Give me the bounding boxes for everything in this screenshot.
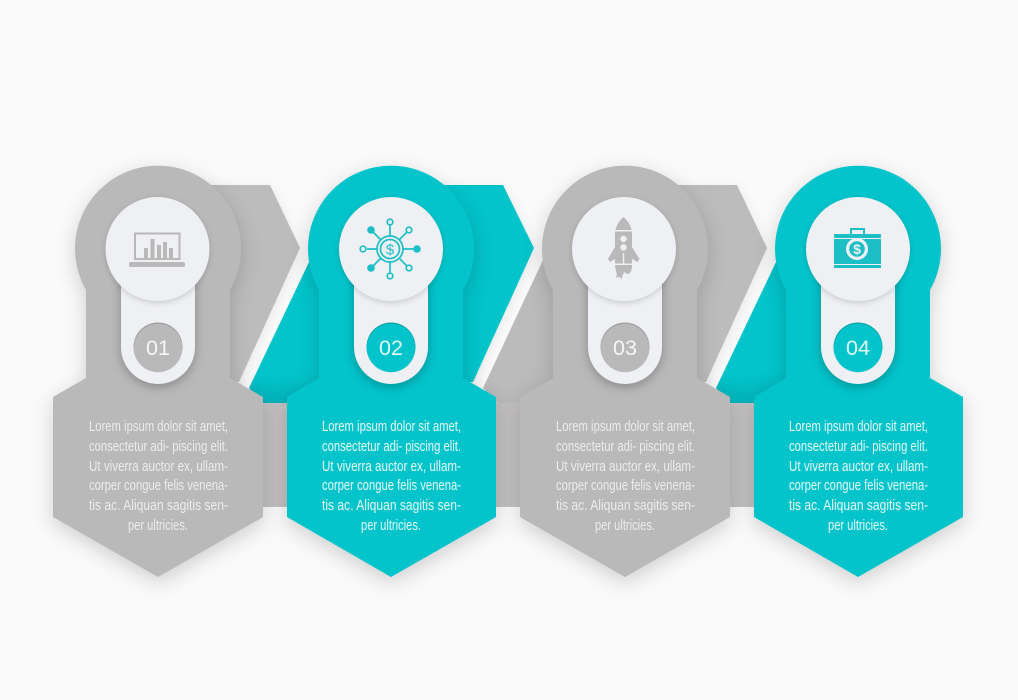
column 3 text: tis ac. Aliquan sagitis sen- [556,498,695,514]
column 1 [53,166,263,577]
column 2 [287,166,496,577]
arrow: grey from column 1 [158,185,300,382]
icon: laptop with bar chart [129,232,185,267]
column 4 [754,166,963,577]
column 2 text: consectetur adi- piscing elit. [322,439,461,455]
column 4 text: Ut viverra auctor ex, ullam- [789,459,928,475]
lower band: columns 1 to 2 [255,403,295,507]
column 4 number badge [834,322,882,372]
column 2 text: Lorem ipsum dolor sit amet, [322,419,461,435]
column 2 number badge [366,322,416,372]
column 4 text [789,419,928,534]
wedge shade: teal into column 2 [249,373,330,403]
column 3 body [520,166,730,577]
wedge shade: teal into column 4 [716,373,800,403]
column 2 text: tis ac. Aliquan sagitis sen- [322,498,461,514]
column 1 body [53,166,263,577]
wedge: teal into column 4 [716,260,860,403]
column 3 text: per ultricies. [595,518,655,534]
column 4 text: per ultricies. [828,518,888,534]
column 4 body [754,166,963,577]
column 3 text [556,419,695,534]
column 3 text: consectetur adi- piscing elit. [556,439,695,455]
icon: dollar briefcase [834,228,881,268]
column 3 [520,166,730,577]
column 4 text: consectetur adi- piscing elit. [789,439,928,455]
column 3 text: corper congue felis venena- [556,478,695,494]
wedge: grey into column 3 [483,260,630,403]
icon: dollar briefcase: $ [853,241,861,257]
column 3 pill [588,249,662,384]
column 2 text: per ultricies. [361,518,421,534]
column 3 text: Lorem ipsum dolor sit amet, [556,419,695,435]
lower band: columns 3 to 4 [722,403,762,507]
arrow: grey from column 3 [625,185,767,382]
column 1 text: consectetur adi- piscing elit. [89,439,228,455]
column 4 text: tis ac. Aliquan sagitis sen- [789,498,928,514]
column 1 number badge [134,322,182,372]
column 3 number badge [600,322,650,372]
icon: dollar network [360,219,421,279]
column 2 icon disc [339,197,443,301]
column 4 pill [821,249,895,384]
column 1 text: corper congue felis venena- [89,478,228,494]
column 1 text [89,419,228,534]
column 4 text: Lorem ipsum dolor sit amet, [789,419,928,435]
column 2 pill [354,249,428,384]
column 2 number badge: 02 [379,336,403,360]
icon: dollar network: $ [386,242,395,258]
column 3 number badge: 03 [613,336,637,360]
column 4 icon disc [806,197,910,301]
column 3 text: Ut viverra auctor ex, ullam- [556,459,695,475]
wedge: teal into column 2 [249,260,400,403]
column 1 number badge: 01 [146,336,170,360]
column 1 text: tis ac. Aliquan sagitis sen- [89,498,228,514]
connector bands behind the columns [158,185,860,507]
column 4 number badge: 04 [846,336,870,360]
column 3 icon disc [572,197,676,301]
column 1 text: Lorem ipsum dolor sit amet, [89,419,228,435]
column 2 text: Ut viverra auctor ex, ullam- [322,459,461,475]
column 2 body [287,166,496,577]
column 1 text: per ultricies. [128,518,188,534]
arrow: teal from column 2 [391,185,534,382]
column 1 text: Ut viverra auctor ex, ullam- [89,459,228,475]
column 1 pill [121,249,195,384]
column 1 icon disc [106,197,210,301]
column 4 text: corper congue felis venena- [789,478,928,494]
lower band: columns 2 to 3 [488,403,528,507]
icon: rocket [608,217,640,280]
column 2 text [322,419,461,534]
column 2 text: corper congue felis venena- [322,478,461,494]
